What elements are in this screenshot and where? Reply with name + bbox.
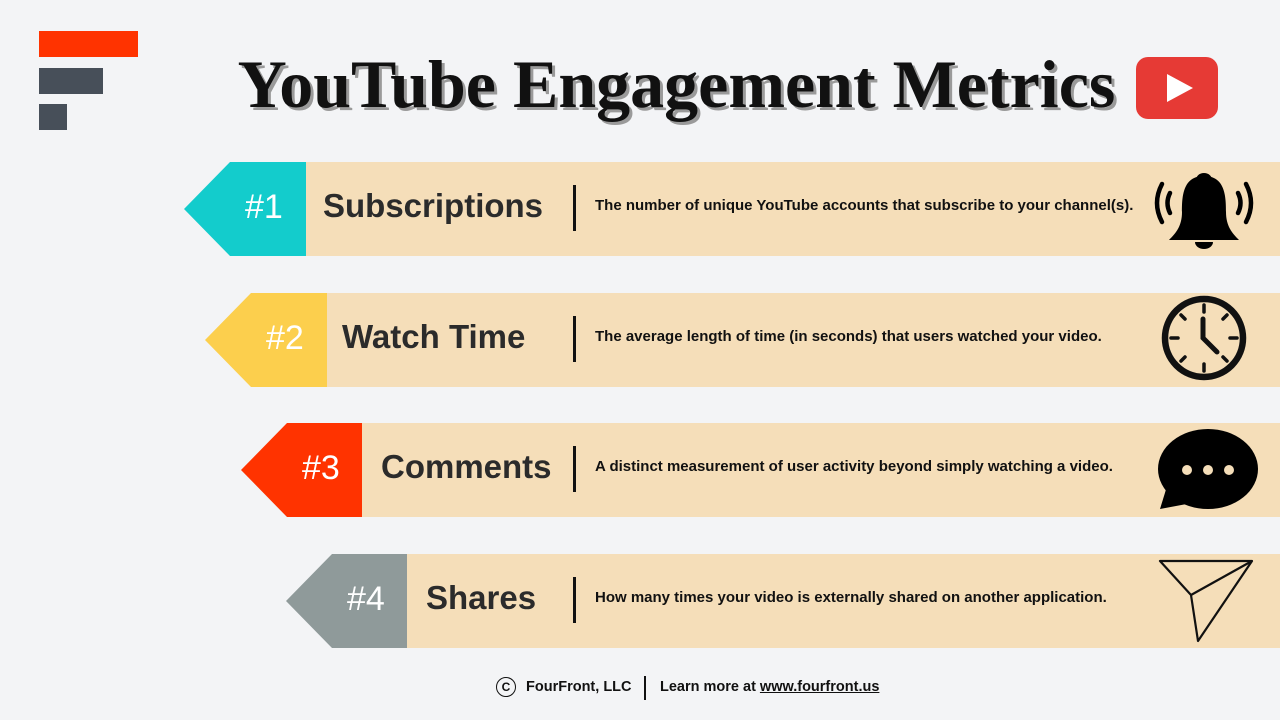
panel: shares: Shares [426,579,536,616]
icon: copyright: C [502,680,510,694]
panel: watch time: #2 [266,319,304,357]
panel: comments: A distinct measurement of user activity beyond simply watching a video. [595,458,1113,475]
panel: subscriptions [184,162,1280,256]
icon: bell [1154,173,1254,249]
icon: speech bubble [1158,429,1258,509]
icon: clock [1162,296,1246,380]
footer [496,676,880,700]
panel: subscriptions: The number of unique YouTube accounts that subscribe to your channel(s). [595,197,1133,214]
panel: watch time: The average length of time (in seconds) that users watched your video. [595,328,1102,345]
title: YouTube Engagement Metrics [238,46,1115,122]
panel: watch time [205,293,1280,387]
panel: comments [241,423,1280,517]
panel: watch time: Watch Time [342,318,525,355]
panel: shares: How many times your video is externally shared on another application. [595,589,1107,606]
panel: comments: #3 [302,449,340,487]
footer: FourFront, LLC [526,679,632,695]
panel: subscriptions: #1 [245,188,283,226]
icon: copyright [496,677,516,697]
footer: Learn more at www.fourfront.us [660,679,879,695]
logo [39,31,138,130]
panel: comments: Comments [381,448,552,485]
panel: shares: #4 [347,580,385,618]
panel: subscriptions: Subscriptions [323,187,543,224]
panel: shares [286,554,1280,648]
icon: youtube logo [1136,57,1218,119]
icon: paper plane [1158,560,1254,642]
